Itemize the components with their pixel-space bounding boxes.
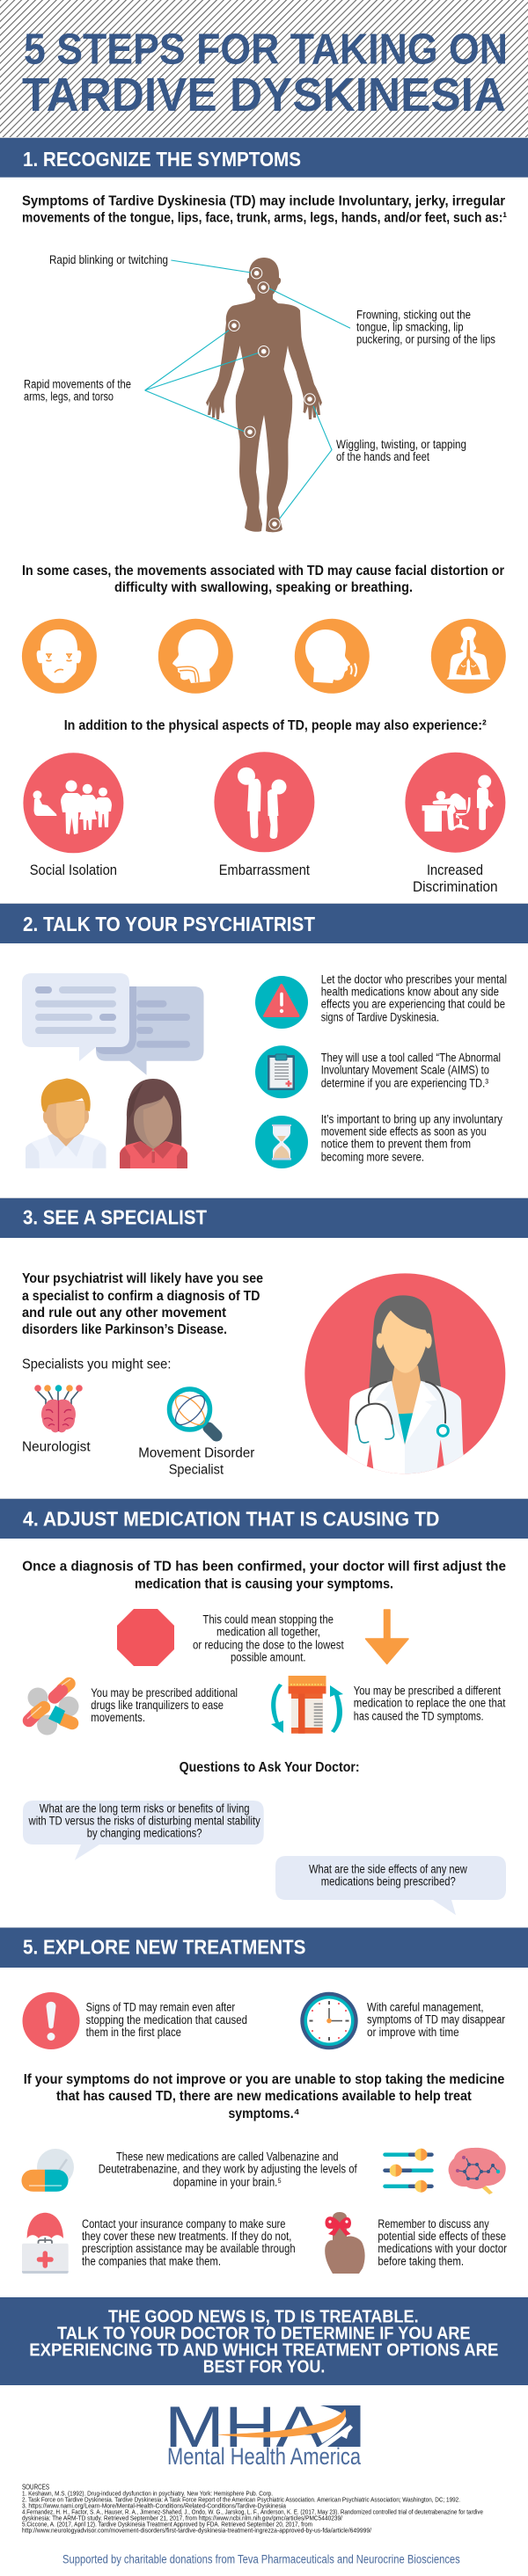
label: rapid movements: Rapid movements of the <box>24 378 131 391</box>
label: increased discrimination: Discrimination <box>413 879 498 895</box>
text: careful management: or improve with time <box>367 2026 459 2039</box>
text: side effects: medications with your doctor <box>378 2242 507 2255</box>
text: signs of TD remain: them in the first place <box>86 2026 181 2039</box>
closing message banner: THE GOOD NEWS IS, TD IS TREATABLE. <box>108 2307 419 2327</box>
text: AIMS tool <box>321 1051 501 1090</box>
sources: 2. Task Force on Tardive Dyskinesia. Tardive Dyskinesia: A Task Force Report of the American Psychiatric Association. American Psychiatric Association; Washington, DC; 1992. <box>22 2497 460 2503</box>
callout lines <box>145 260 350 519</box>
closing message banner: BEST FOR YOU. <box>203 2357 325 2377</box>
section heading 4: 4. ADJUST MEDICATION THAT IS CAUSING TD <box>23 1508 439 1531</box>
text: valbenazine: dopamine in your brain.⁵ <box>173 2176 282 2189</box>
logo: Mental Health America: MHA <box>165 2394 324 2459</box>
speech bubble: question 2: What are the side effects of any new <box>309 1863 467 1876</box>
title banner <box>0 0 528 138</box>
label: increased discrimination <box>413 862 498 895</box>
speech bubble: question 1: What are the long term risks or benefits of living <box>40 1802 250 1816</box>
text: stopping medication: possible amount. <box>231 1651 306 1664</box>
section heading 2: 2. TALK TO YOUR PSYCHIATRIST <box>23 913 315 935</box>
icon: lungs <box>431 619 506 694</box>
text: careful management <box>367 2000 505 2039</box>
icon: brain <box>34 1385 83 1432</box>
label: social isolation: Social Isolation <box>30 862 117 878</box>
specialists heading: Specialists you might see: <box>22 1357 171 1372</box>
text: side effects: before taking them. <box>378 2255 464 2268</box>
text: valbenazine: These new medications are called Valbenazine and <box>116 2150 339 2164</box>
diagnosis text <box>22 1560 506 1592</box>
text: bring up effects: notice them to prevent them from <box>321 1138 471 1151</box>
label: wiggling: Wiggling, twisting, or tapping <box>336 438 466 451</box>
body markers <box>229 267 315 529</box>
section heading 2 <box>0 903 528 943</box>
label: frowning: tongue, lip smacking, lip <box>356 321 464 334</box>
text: stopping medication: medication all together, <box>216 1626 320 1639</box>
text: additional drugs: drugs like tranquilizers to ease <box>91 1699 224 1712</box>
text: bring up effects <box>321 1112 502 1164</box>
text: signs of TD remain <box>86 2000 247 2039</box>
text: stopping medication: or reducing the dose to the lowest <box>193 1639 344 1652</box>
icon: brain with molecule <box>449 2148 506 2194</box>
text: insurance: prescription assistance may be available through <box>82 2242 296 2255</box>
body diagram <box>24 253 495 532</box>
speech bubble: question 1: by changing medications? <box>87 1827 202 1840</box>
text: tell the doctor: signs of Tardive Dyskinesia. <box>321 1011 439 1024</box>
item: hourglass <box>255 1116 308 1168</box>
icon: social isolation <box>23 753 123 853</box>
closing message banner: TALK TO YOUR DOCTOR TO DETERMINE IF YOU ARE <box>57 2324 471 2344</box>
text: additional drugs <box>91 1686 238 1724</box>
specialist text: and rule out any other movement <box>22 1306 227 1321</box>
icon: exclamation <box>23 1992 79 2049</box>
text: different medication: has caused the TD symptoms. <box>354 1710 484 1723</box>
speech bubble: question 2: medications being prescribed? <box>321 1875 456 1888</box>
text: insurance: the companies that make them. <box>82 2255 221 2268</box>
icon: insurance umbrella and case <box>22 2213 69 2274</box>
text: AIMS tool: Involuntary Movement Scale (AIMS) to <box>321 1064 489 1077</box>
icon: face <box>22 619 97 694</box>
sources <box>22 2484 483 2534</box>
specialist text: Your psychiatrist will likely have you see <box>22 1271 263 1286</box>
label: neurologist: Neurologist <box>22 1440 91 1455</box>
text: insurance <box>82 2217 296 2268</box>
new medications text <box>24 2072 504 2121</box>
icon: capsule <box>21 2149 74 2192</box>
specialist text: a specialist to confirm a diagnosis of TD <box>22 1289 260 1304</box>
text: bring up effects: It’s important to bring up any involuntary <box>321 1112 502 1125</box>
label: increased discrimination: Increased <box>427 862 483 878</box>
section heading 5: 5. EXPLORE NEW TREATMENTS <box>23 1935 306 1958</box>
facial distortion text <box>22 564 504 595</box>
diagnosis text: medication that is causing your symptoms. <box>135 1577 393 1592</box>
icon: embarrassment <box>214 752 314 852</box>
text: side effects: Remember to discuss any <box>378 2217 489 2230</box>
item: warning <box>255 976 308 1029</box>
icon: stop octagon <box>117 1609 174 1666</box>
text: different medication: medication to replace the one that <box>354 1697 506 1710</box>
icon: sliders <box>385 2149 431 2193</box>
new medications text: that has caused TD, there are new medications available to help treat <box>56 2089 472 2104</box>
text: valbenazine: Deutetrabenazine, and they work by adjusting the levels of <box>99 2163 357 2176</box>
label: wiggling: of the hands and feet <box>336 450 429 463</box>
section heading 1: 1. RECOGNIZE THE SYMPTOMS <box>23 148 301 171</box>
icon: swallowing head <box>158 619 233 694</box>
illustration: man <box>26 1078 106 1168</box>
logo: Mental Health America: Mental Health America <box>167 2443 362 2470</box>
text: tell the doctor: health medications know about any side <box>321 985 499 998</box>
sources: 5.Ciccone, A. (2017, April 12). Tardive Dyskinesia Treatment Approved by FDA. Retrieved September 20, 2017, from <box>22 2521 312 2528</box>
specialist text <box>22 1271 263 1337</box>
text: stopping medication <box>193 1613 344 1664</box>
text: different medication: You may be prescribed a different <box>354 1685 501 1698</box>
speech bubble: question 1: with TD versus the risks of disturbing mental stability <box>28 1815 260 1828</box>
icon: clock <box>300 1992 358 2049</box>
label: embarrassment: Embarrassment <box>219 862 310 878</box>
closing message banner <box>0 2297 528 2385</box>
facial distortion text: difficulty with swallowing, speaking or breathing. <box>114 580 413 595</box>
icon: speaking head <box>295 619 370 694</box>
illustration: speech bubbles <box>22 973 204 1075</box>
text: signs of TD remain: Signs of TD may remain even after <box>86 2000 235 2013</box>
icon: finger with ribbon <box>325 2212 365 2274</box>
section heading 3 <box>0 1197 528 1238</box>
label: movement disorder specialist <box>138 1446 254 1478</box>
illustration: doctor <box>304 1273 505 1477</box>
label: rapid movements <box>24 378 131 404</box>
intro text <box>22 193 507 225</box>
text: insurance: Contact your insurance company to make sure <box>82 2217 285 2230</box>
section heading 4 <box>0 1498 528 1539</box>
questions heading: Questions to Ask Your Doctor: <box>180 1760 360 1775</box>
speech bubble: question 2 <box>275 1856 506 1915</box>
label: frowning <box>356 309 495 346</box>
text: additional drugs: You may be prescribed additional <box>91 1686 238 1699</box>
sources: 4.Fernandez, H. H., Factor, S. A., Hauser, R. A., Jimenez-Shahed, J., Ondo, W. G., Jarskog, L. F., Anderson, K. E. (2017, May 23). Randomized controlled trial of deutetrabenazine for tardive <box>22 2509 483 2515</box>
label: frowning: puckering, or pursing of the lips <box>356 333 495 346</box>
text: careful management: With careful management, <box>367 2000 484 2013</box>
item: clipboard <box>255 1045 308 1098</box>
section heading 5 <box>0 1927 528 1968</box>
text: valbenazine <box>99 2150 357 2189</box>
label: frowning: Frowning, sticking out the <box>356 309 471 322</box>
sources: 1. Keshawn, M.S. (1992). Drug-induced dysfunction in psychiatry. New York: Hemisphere Pub. Corp. <box>22 2491 273 2497</box>
text: side effects <box>378 2217 507 2268</box>
section heading 3: 3. SEE A SPECIALIST <box>23 1206 207 1229</box>
text: AIMS tool: determine if you are experiencing TD.³ <box>321 1077 488 1090</box>
sources: dyskinesia: The ARM-TD study. Retrieved September 21, 2017, from https://www.ncbi.nlm.nih.gov/pmc/articles/PMC5440239/ <box>22 2515 342 2521</box>
icon: magnifier <box>169 1389 216 1436</box>
new medications text: symptoms.⁴ <box>229 2107 300 2121</box>
additional experiences text: In addition to the physical aspects of TD, people may also experience:² <box>64 718 487 733</box>
label: rapid movements: arms, legs, and torso <box>24 390 114 404</box>
icon: down arrow <box>366 1610 408 1663</box>
title banner: TARDIVE DYSKINESIA <box>22 69 506 121</box>
sources: http://www.neurologyadvisor.com/movement-disorders/first-tardive-dyskinesia-treatment-ingrezza-approved-by-us-fda/article/649999/ <box>22 2528 371 2534</box>
text: bring up effects: movement side effects as soon as you <box>321 1125 487 1139</box>
label: blinking: Rapid blinking or twitching <box>49 253 168 266</box>
text: stopping medication: This could mean stopping the <box>202 1613 334 1626</box>
label: movement disorder specialist: Movement Disorder <box>138 1446 254 1461</box>
sources: 3. https://www.nami.org/Learn-More/Mental-Health-Conditions/Related-Conditions/Tardive-Dyskinesia <box>22 2503 286 2509</box>
label: movement disorder specialist: Specialist <box>169 1463 224 1478</box>
specialist text: disorders like Parkinson’s Disease. <box>22 1322 227 1337</box>
label: wiggling <box>336 438 466 463</box>
speech bubble: question 1 <box>23 1801 264 1860</box>
diagnosis text: Once a diagnosis of TD has been confirmed, your doctor will first adjust the <box>22 1560 506 1575</box>
icon: pill bottle with swap arrows <box>271 1676 343 1734</box>
sources: SOURCES <box>22 2484 49 2492</box>
logo: Mental Health America <box>165 2394 362 2470</box>
icon: pills <box>27 1679 79 1736</box>
text: insurance: they cover these new treatments. If they do not, <box>82 2230 291 2243</box>
text: tell the doctor <box>321 972 507 1024</box>
text: side effects: potential side effects of these <box>378 2230 506 2243</box>
illustration: woman <box>120 1079 187 1168</box>
section heading 1 <box>0 138 528 178</box>
text: additional drugs: movements. <box>91 1711 145 1724</box>
icon: discrimination <box>405 753 505 853</box>
intro text: Symptoms of Tardive Dyskinesia (TD) may include Involuntary, jerky, irregular <box>22 193 505 208</box>
text: different medication <box>354 1685 506 1723</box>
text: bring up effects: becoming more severe. <box>321 1151 424 1164</box>
text: signs of TD remain: stopping the medication that caused <box>86 2013 247 2027</box>
body silhouette <box>206 258 322 532</box>
